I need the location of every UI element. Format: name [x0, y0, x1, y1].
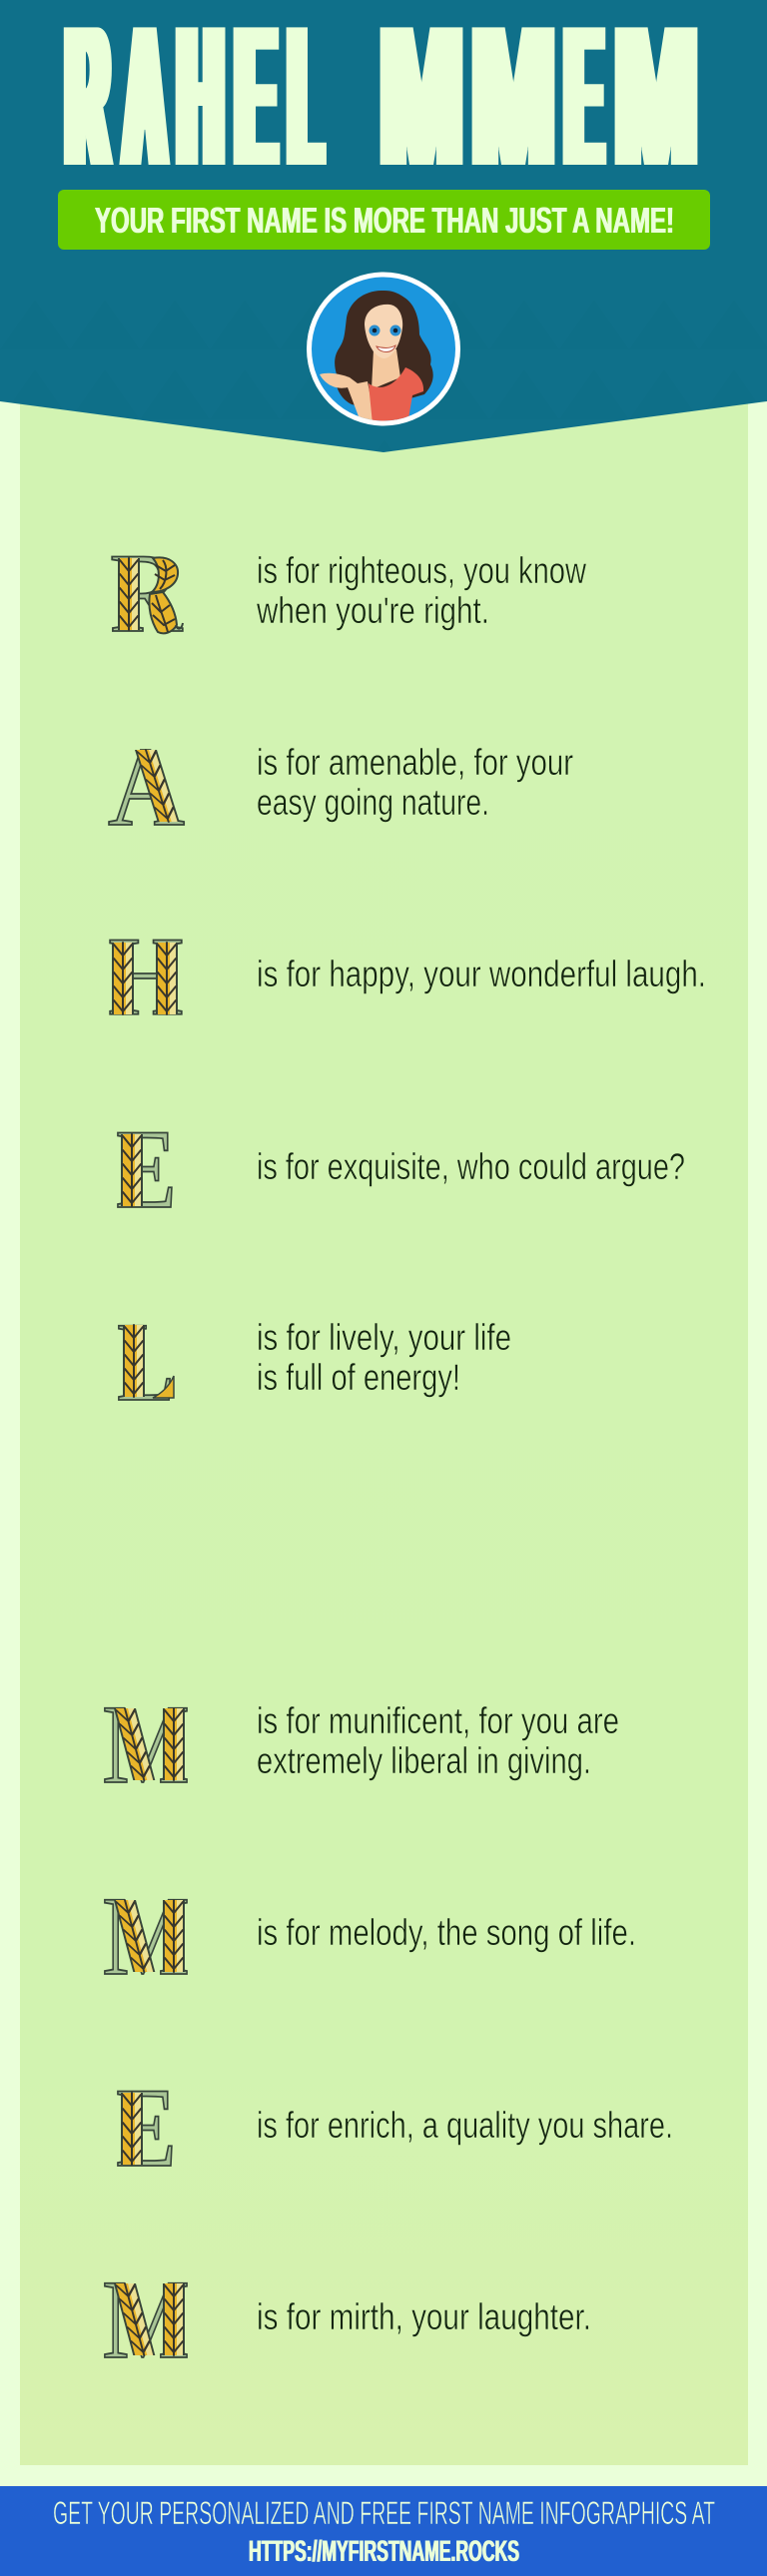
letter E: E — [115, 2066, 177, 2191]
header banner — [0, 0, 767, 452]
hair — [335, 291, 433, 409]
letter H: H — [107, 915, 185, 1039]
letter E: E — [115, 1107, 177, 1232]
letter row: H — [107, 915, 706, 1039]
text: is for amenable, for your — [257, 741, 573, 783]
tagline bar — [58, 190, 710, 250]
text: extremely liberal in giving. — [257, 1739, 591, 1781]
smile — [377, 345, 395, 352]
letter row: M — [102, 2257, 591, 2382]
text: is for munificent, for you are — [257, 1699, 619, 1741]
title — [67, 0, 697, 208]
text: when you're right. — [256, 589, 489, 631]
footer line 2: HTTPS://MYFIRSTNAME.ROCKS — [249, 2535, 519, 2568]
letter M: M — [102, 1682, 190, 1807]
avatar: woman in circle — [307, 272, 460, 425]
eyes — [370, 325, 380, 335]
letter row: L — [116, 1300, 511, 1425]
letter row: M — [102, 1682, 619, 1807]
shirt — [369, 367, 423, 424]
neck and arm — [320, 349, 400, 424]
panel: letter list background — [20, 379, 748, 2465]
text: is for mirth, your laughter. — [257, 2295, 591, 2337]
letter R: R — [109, 531, 184, 656]
letter row: M — [102, 1874, 636, 1999]
letter M: M — [102, 2257, 190, 2382]
text: is full of energy! — [257, 1356, 460, 1398]
letter row: A — [108, 725, 573, 850]
letter row: E — [115, 1107, 685, 1232]
text: is for righteous, you know — [257, 549, 587, 591]
text: is for melody, the song of life. — [257, 1911, 636, 1953]
letter row: E — [115, 2066, 673, 2191]
text: is for lively, your life — [257, 1316, 511, 1358]
letter L: L — [116, 1300, 176, 1425]
letter row: R — [109, 531, 587, 656]
text: easy going nature. — [257, 781, 489, 823]
letter A: A — [108, 725, 185, 850]
footer — [0, 2486, 767, 2576]
face — [365, 305, 402, 358]
letter M: M — [102, 1874, 190, 1999]
